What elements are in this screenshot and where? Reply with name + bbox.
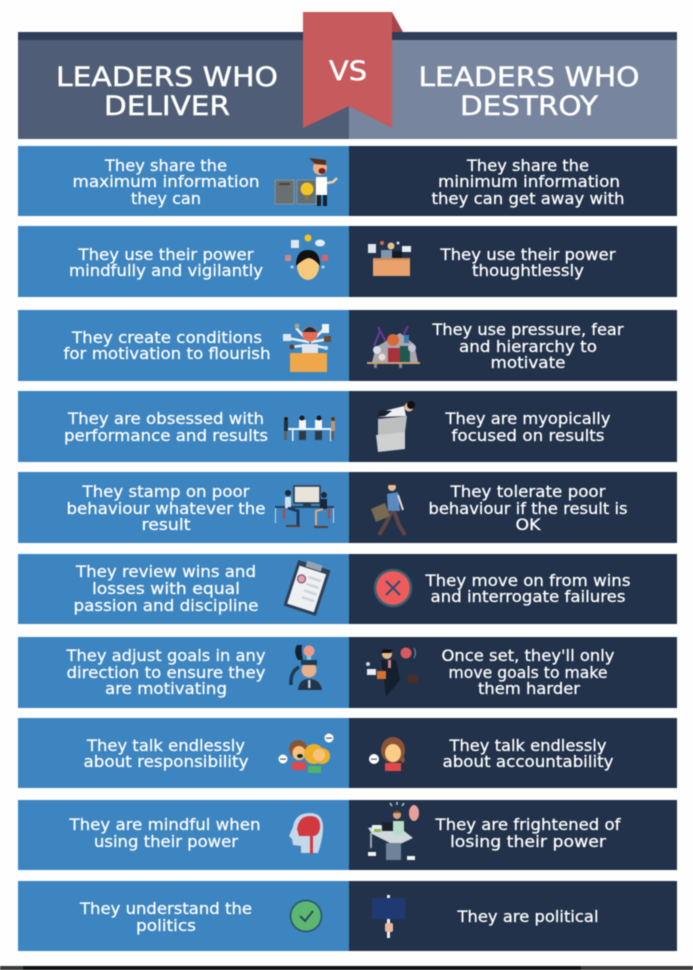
row 1 <box>18 146 677 216</box>
text: tolerate poor behaviour <box>428 482 628 534</box>
heading: leaders who destroy: LEADERS WHO <box>418 62 640 93</box>
text: adjust goals: are motivating <box>105 679 227 698</box>
text: tolerate poor behaviour: behaviour if the result is <box>428 499 628 518</box>
text: responsibility: about responsibility <box>84 752 248 771</box>
text: obsessed with performance: They are obsessed with <box>67 409 264 428</box>
text: accountability <box>442 736 614 771</box>
heading: leaders who deliver <box>56 62 278 122</box>
ribbon with VS <box>303 12 403 128</box>
icon: two women talking <box>278 734 334 773</box>
text: review wins and losses: passion and discipline <box>74 596 258 615</box>
row 2 <box>18 226 677 297</box>
row 10 <box>18 881 677 951</box>
icon: woman talking <box>369 737 405 771</box>
text: responsibility: They talk endlessly <box>86 736 245 755</box>
text: mindful when using <box>68 815 260 851</box>
text: stamp on poor behaviour <box>66 482 266 534</box>
text: once set: move goals to make <box>448 663 608 682</box>
text: stamp on poor behaviour: They stamp on poor <box>81 482 250 501</box>
text: review wins and losses: losses with equal <box>92 579 240 598</box>
text: stamp on poor behaviour: behaviour whatever the <box>66 499 266 518</box>
icon: walking man with briefcase <box>371 482 405 535</box>
icon: meeting table <box>284 416 335 441</box>
text: obsessed with performance: performance and results <box>64 426 268 445</box>
text: tolerate poor behaviour: OK <box>516 515 541 534</box>
heading: leaders who destroy <box>418 62 640 122</box>
text: tolerate poor behaviour: They tolerate poor <box>449 482 606 501</box>
text: they share the maximum: maximum information <box>72 172 260 191</box>
text: frightened: losing their power <box>450 832 606 851</box>
icon: desk with clutter <box>368 241 411 276</box>
text: myopically focused: focused on results <box>452 426 604 445</box>
row 8 <box>18 718 677 788</box>
text: move on from wins <box>424 571 630 606</box>
text: pressure fear hierarchy: motivate <box>490 353 566 372</box>
text: understand the politics: politics <box>136 916 196 935</box>
text: adjust goals: They adjust goals in any <box>65 646 266 665</box>
text: myopically focused: They are myopically <box>444 409 610 428</box>
text: frightened <box>434 815 621 851</box>
text: they share the minimum: they can get away with <box>432 189 624 208</box>
icon: frightened man at desk <box>368 802 419 860</box>
text: once set: Once set, they'll only <box>442 646 614 665</box>
text: once set: them harder <box>478 679 580 698</box>
header panel <box>18 12 677 139</box>
icon: multitasking man at desk <box>283 324 331 372</box>
text: power thoughtlessly: They use their power <box>439 245 616 264</box>
bottom dark strip <box>0 966 693 970</box>
text: power mindfully: They use their power <box>77 245 254 264</box>
row 5 <box>18 472 677 543</box>
heading: leaders who deliver: DELIVER <box>104 91 230 122</box>
text: move on from wins: and interrogate failures <box>430 587 626 606</box>
icon: hand holding sign <box>372 895 405 938</box>
ribbon with VS: VS <box>329 56 367 87</box>
icon: two people at a computer <box>275 486 334 528</box>
icon: messy pile on desk <box>367 326 420 368</box>
text: power thoughtlessly: thoughtlessly <box>472 261 584 280</box>
row 9 <box>18 800 677 870</box>
text: they share the maximum: they can <box>131 189 201 208</box>
row 3 <box>18 310 677 381</box>
text: responsibility <box>84 736 248 771</box>
text: pressure fear hierarchy: and hierarchy to <box>459 337 597 356</box>
icon: thinking head <box>285 234 328 280</box>
text: they share the maximum <box>72 156 260 208</box>
text: conditions for motivation: for motivation to flourish <box>64 344 270 363</box>
row 4 <box>18 391 677 462</box>
icon: head with brain <box>289 813 323 854</box>
text: frightened: They are frightened of <box>434 815 621 834</box>
icon: clipboard <box>283 558 331 616</box>
text: accountability: They talk endlessly <box>448 736 606 755</box>
text: power mindfully: mindfully and vigilantly <box>69 261 263 280</box>
icon: man asleep on paper stacks <box>376 401 415 452</box>
icon: green check circle <box>290 900 322 932</box>
text: pressure fear hierarchy: They use pressure, fear <box>431 320 624 339</box>
icon: running businessman <box>366 648 418 697</box>
text: mindful when using: They are mindful when <box>68 815 260 834</box>
text: understand the politics: They understand the <box>79 899 252 918</box>
text: review wins and losses <box>74 562 258 615</box>
text: conditions for motivation <box>64 328 270 363</box>
icon: man with idea bulb <box>291 645 322 690</box>
text: obsessed with performance <box>64 409 268 445</box>
text: pressure fear hierarchy <box>431 320 624 372</box>
text: stamp on poor behaviour: result <box>142 515 190 534</box>
icon: red cross circle <box>375 570 411 606</box>
text: power thoughtlessly <box>439 245 616 280</box>
text: mindful when using: using their power <box>94 832 238 851</box>
row 7 <box>18 637 677 708</box>
text: adjust goals <box>65 646 266 698</box>
heading: leaders who destroy: DESTROY <box>460 91 599 122</box>
text: adjust goals: direction to ensure they <box>66 663 266 682</box>
text: myopically focused <box>444 409 610 445</box>
text: accountability: about accountability <box>442 752 614 771</box>
heading: leaders who deliver: LEADERS WHO <box>56 62 278 93</box>
text: they share the minimum <box>432 156 624 208</box>
row 6 <box>18 554 677 624</box>
text: once set <box>442 646 614 698</box>
text: review wins and losses: They review wins and <box>75 562 256 581</box>
text: conditions for motivation: They create conditions <box>71 328 262 347</box>
text: they are political: They are political <box>456 907 598 926</box>
text: power mindfully <box>69 245 263 280</box>
icon: man with safe and bulb <box>275 158 337 206</box>
text: they share the minimum: They share the <box>466 156 589 175</box>
text: understand the politics <box>79 899 252 935</box>
text: move on from wins: They move on from wins <box>424 571 630 590</box>
text: they share the maximum: They share the <box>104 156 227 175</box>
text: they share the minimum: minimum information <box>438 172 620 191</box>
